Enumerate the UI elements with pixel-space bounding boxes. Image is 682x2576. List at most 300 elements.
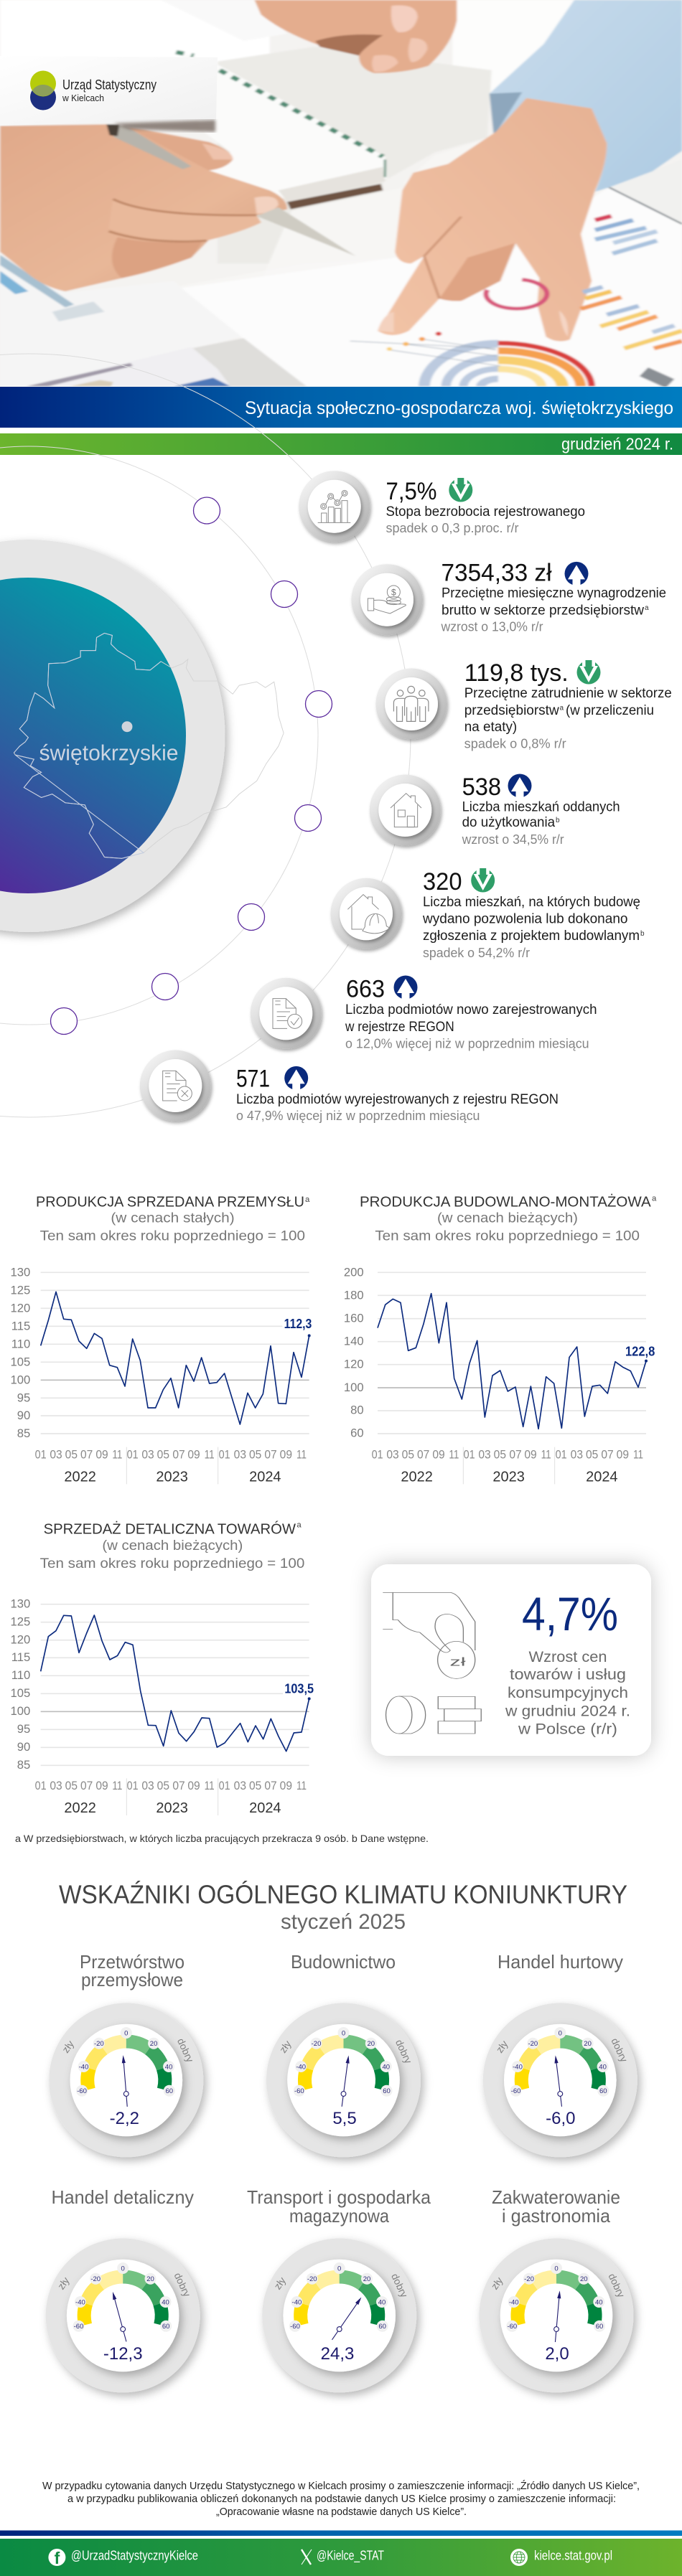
grid and axis: 200 [344,1265,364,1279]
gauge: retail: 20 [146,2275,154,2283]
gauge: wholesale: 0 [559,2029,562,2037]
left hand [0,124,287,291]
icon: arrow up [564,562,589,586]
gauge label: accommodation [492,2186,620,2227]
line chart: construction production [344,1194,657,1485]
gauge: construction: 40 [383,2063,390,2071]
grid and axis: 05 [494,1448,506,1462]
last value: 103,5 [284,1680,314,1696]
grid and axis: 07 [80,1779,93,1792]
heading: business climate: WSKAŹNIKI OGÓLNEGO KLIMATU KONIUNKTURY [59,1880,627,1909]
grid and axis: 01 [219,1448,230,1462]
grid and axis: 11 [449,1448,459,1462]
icon: arrow up [393,976,418,1000]
label: b [556,817,560,824]
grid and axis: 2024 [249,1800,281,1816]
label: Liczba mieszkań, na których budowę [423,895,640,910]
callout text: w Polsce (r/r) [518,1721,617,1738]
series line [378,1294,646,1429]
last value: 112,3 [284,1316,312,1331]
label [462,799,620,830]
grid and axis: 2022 [64,1800,96,1816]
grid and axis: 09 [95,1779,108,1792]
gauge: transport: -60 [290,2323,300,2331]
change: spadek o 54,2% r/r [423,946,530,960]
gauge: industry: -40 [79,2063,88,2071]
footer blue strip [0,2530,682,2536]
grid and axis: 09 [187,1448,200,1462]
grid and axis: 11 [296,1448,307,1462]
indicator: wages [352,560,666,635]
gauge: retail: 40 [162,2298,169,2306]
citation note: W przypadku cytowania danych Urzędu Statystycznego w Kielcach prosimy o zamieszczenie informacji: „Źródło danych US Kielce”, [42,2480,640,2492]
grid and axis [344,1265,646,1485]
label: a [560,705,564,712]
grid and axis: 110 [11,1337,30,1350]
change: o 12,0% więcej niż w poprzednim miesiącu [345,1037,589,1051]
value: 538 [462,774,501,801]
change: wzrost o 34,5% r/r [462,832,564,847]
last value [284,1680,314,1700]
website: kielce.stat.gov.pl [534,2549,612,2563]
grid and axis: 11 [296,1779,307,1792]
footnote: a W przedsiębiorstwach, w których liczba pracujących przekracza 9 osób. b Dane wstępne. [15,1833,429,1844]
gauge: industry: 20 [150,2040,157,2048]
icon: arrow down [471,868,495,893]
gauge: wholesale: -40 [513,2063,523,2071]
grid and axis: 05 [249,1448,261,1462]
gauge: construction: zły [277,2039,294,2055]
series line [41,1292,309,1424]
grid and axis: 01 [464,1448,475,1462]
callout value: 4,7% [522,1587,618,1640]
gauge label: transport: Transport i gospodarka [247,2186,431,2208]
grid and axis: 03 [478,1448,491,1462]
grid and axis: 115 [11,1319,30,1332]
grid and axis: 115 [11,1650,30,1664]
gauge: transport [262,2239,416,2392]
indicator: new REGON entities [251,976,597,1051]
gauge label: transport [247,2186,431,2227]
icon: hand with coins [352,564,422,635]
grid and axis: 05 [157,1779,169,1792]
gauge: industry: 0 [124,2029,128,2037]
grid and axis: 09 [432,1448,445,1462]
change: o 47,9% więcej niż w poprzednim miesiącu [236,1109,480,1123]
pen [106,124,192,169]
facebook handle: @UrzadStatystycznyKielce [71,2549,198,2563]
purple nodes [50,497,332,1035]
grid and axis: 11 [205,1448,215,1462]
label [464,686,672,735]
gauge: construction: dobry [393,2038,414,2065]
gauge: construction: 5,5 [332,2109,357,2128]
grid and axis: 03 [50,1779,62,1792]
map outline inside circle [14,633,161,858]
gauge: retail: 60 [162,2323,169,2331]
gauge: accommodation: dobry [606,2272,627,2299]
gauge: transport: 0 [337,2265,341,2272]
gauge: accommodation: 2,0 [545,2344,569,2364]
grid and axis: 2023 [492,1469,525,1485]
grid and axis: 130 [11,1597,30,1610]
indicator: employment [376,659,672,751]
grid and axis: 05 [157,1448,169,1462]
label [422,895,645,944]
grid and axis: 05 [586,1448,598,1462]
grid and axis: 120 [11,1301,30,1315]
series line [41,1615,309,1752]
grid and axis: 03 [234,1779,246,1792]
gauge: accommodation: 0 [554,2265,559,2272]
grid and axis: 90 [17,1740,30,1754]
gauge: retail: -12,3 [103,2344,143,2364]
sleeve white [272,24,283,32]
callout text [505,1649,630,1738]
gauge: accommodation: -20 [524,2275,534,2283]
gauge label: accommodation: i gastronomia [502,2205,611,2227]
chart title [360,1194,657,1244]
icon: logo circles [30,70,56,111]
label: do użytkowania [462,815,556,830]
gauge: retail: dobry [172,2271,193,2298]
callout text: towarów i usług [510,1667,626,1683]
right shirt [490,0,682,192]
heading: business climate [59,1880,627,1934]
gauge: industry: -2,2 [110,2109,139,2128]
gauge: wholesale: 60 [599,2087,607,2095]
grid and axis: 11 [112,1448,122,1462]
grid and axis: 09 [280,1779,292,1792]
gauge: accommodation: -60 [507,2323,517,2331]
line chart: retail sales [11,1520,314,1816]
gauge: wholesale: -20 [528,2040,538,2048]
grid and axis: 01 [372,1448,383,1462]
grid and axis: 100 [11,1373,30,1386]
grid and axis: 01 [556,1448,567,1462]
icon: globe [510,2549,528,2566]
grid and axis: 09 [524,1448,537,1462]
label: zgłoszenia z projektem budowlanym [423,929,640,944]
grid and axis: 01 [127,1779,139,1792]
change: spadek o 0,3 p.proc. r/r [386,521,518,535]
chart title: (w cenach bieżących) [437,1211,578,1226]
icon: hand with coins: $ [391,587,396,597]
gauge: transport: -20 [307,2275,317,2283]
citation note: „Opracowanie własne na podstawie danych US Kielce”. [216,2506,467,2518]
grid and axis: 05 [249,1779,261,1792]
last value [284,1316,312,1337]
chart title [36,1194,310,1244]
grid and axis: 07 [601,1448,614,1462]
gauge label: wholesale: Handel hurtowy [498,1951,623,1973]
gauge: accommodation: 40 [595,2298,603,2306]
gauge: wholesale: zły [494,2039,510,2055]
chart title: Ten sam okres roku poprzedniego = 100 [40,1228,305,1244]
grid and axis: 05 [65,1779,78,1792]
label: Liczba podmiotów nowo zarejestrowanych [345,1002,597,1017]
grid and axis: 07 [80,1448,93,1462]
icon: facebook [48,2549,65,2567]
gauge: transport: zły [271,2275,288,2292]
label: a [645,604,649,612]
value: 320 [423,868,462,896]
label: b [640,930,645,938]
gauge: construction: 20 [368,2040,375,2048]
grid and axis: 03 [141,1779,154,1792]
icon: X [302,2549,312,2565]
gauge: accommodation: zły [489,2275,505,2292]
gauge: accommodation: 20 [580,2275,588,2283]
chart title: (w cenach stałych) [111,1211,235,1226]
gauge: retail: -40 [75,2298,85,2306]
grid and axis: 07 [172,1779,185,1792]
grid and axis: 07 [264,1448,277,1462]
map outline outside circle [14,633,284,858]
chart title: a [305,1195,310,1204]
change: wzrost o 13,0% r/r [441,619,543,634]
indicator: dwellings completed [370,774,620,847]
grid and axis: 2023 [156,1469,188,1485]
grid and axis: 05 [65,1448,78,1462]
icon: hand with coins [383,1592,481,1734]
grid and axis: 2022 [64,1469,96,1485]
grid and axis: 180 [344,1289,364,1302]
icon: house with helmet [330,878,402,949]
logo text: w Kielcach [62,93,104,103]
gauge: industry [49,2003,203,2157]
gauge: construction [266,2003,421,2157]
gauge: industry: dobry [175,2036,196,2064]
grid and axis: 120 [11,1632,30,1646]
grid and axis: 105 [11,1686,30,1700]
grid and axis: 95 [17,1722,30,1736]
logo text [62,77,157,103]
title band: blue [0,387,682,428]
gauge: construction: 0 [342,2029,345,2037]
grid and axis: 09 [280,1448,292,1462]
chart title: a [296,1520,302,1529]
gauge: construction: 60 [383,2087,391,2095]
grid and axis: 05 [402,1448,414,1462]
grid and axis: 2023 [156,1800,188,1816]
region name: świętokrzyskie [39,740,178,765]
grid and axis: 09 [187,1779,200,1792]
chart title [40,1520,304,1571]
label: Liczba podmiotów wyrejestrowanych z rejestru REGON [236,1092,559,1107]
label: brutto w sektorze przedsiębiorstw [442,603,644,618]
grid and axis: 120 [344,1358,364,1371]
gauge: industry: 60 [166,2087,173,2095]
indicator: building permits [330,868,645,960]
gauge: wholesale: 40 [599,2063,607,2071]
title band: blue: Sytuacja społeczno-gospodarcza woj. świętokrzyskiego [245,398,673,418]
label: przedsiębiorstw [464,703,559,718]
gauge label: industry [80,1951,184,1990]
last value: 122,8 [625,1343,655,1358]
gauge: transport: -40 [292,2298,302,2306]
grid and axis: 110 [11,1668,30,1682]
panel: region circle [0,540,284,932]
grid and axis: 03 [571,1448,583,1462]
gauge: transport: 60 [378,2323,386,2331]
gauge: wholesale: 20 [584,2040,592,2048]
grid and axis: 11 [112,1779,122,1792]
grid and axis: 125 [11,1283,30,1297]
grid and axis: 140 [344,1335,364,1348]
grid and axis: 11 [633,1448,643,1462]
icon: bar chart [299,471,370,542]
gauge label: construction: Budownictwo [291,1951,396,1973]
value: 119,8 tys. [464,659,569,687]
chart title: (w cenach bieżących) [102,1538,243,1553]
icon: arrow down [449,478,472,502]
chart title: SPRZEDAŻ DETALICZNA TOWARÓW [44,1520,296,1537]
grid and axis: 90 [17,1409,30,1422]
grid and axis: 2022 [401,1469,433,1485]
grid and axis: 85 [17,1758,30,1772]
callout text: konsumpcyjnych [508,1685,628,1701]
callout text: Wzrost cen [528,1649,607,1665]
label: wydano pozwolenia lub dokonano [422,912,627,927]
label [345,1002,597,1035]
gauge label: transport: magazynowa [289,2205,389,2227]
grid and axis: 03 [141,1448,154,1462]
gauge: construction: -60 [294,2087,304,2095]
line chart: industrial production [11,1194,312,1485]
header photo: hands over charts [0,0,682,386]
gauge label: retail: Handel detaliczny [52,2186,194,2208]
grid and axis: 2024 [249,1469,281,1485]
gauge: accommodation [480,2239,633,2392]
grid and axis: 2024 [586,1469,618,1485]
grid and axis [11,1265,309,1485]
gauge: retail: -20 [90,2275,101,2283]
value: 571 [236,1065,270,1092]
panel: inflation callout [371,1564,651,1756]
grid and axis: 07 [417,1448,429,1462]
date band: green [0,433,682,455]
label [442,586,666,618]
X handle: @Kielce_STAT [317,2549,384,2563]
icon: people [376,669,447,739]
grid and axis: 130 [11,1265,30,1279]
gauge label: accommodation: Zakwaterowanie [492,2186,620,2208]
grid and axis: 03 [50,1448,62,1462]
label: (w przeliczeniu [566,703,654,718]
notebook [208,65,387,198]
grid and axis: 07 [509,1448,522,1462]
chart title: a [652,1194,657,1203]
gauge: wholesale: dobry [609,2036,630,2064]
grid and axis: 01 [127,1448,139,1462]
label: Przeciętne miesięczne wynagrodzenie [442,586,666,601]
indicator: unemployment [299,471,585,542]
grid and axis: 100 [11,1704,30,1718]
concentric chart [418,339,500,386]
grid and axis: 11 [205,1779,215,1792]
chart title: PRODUKCJA BUDOWLANO-MONTAŻOWA [360,1194,651,1211]
bars right upper [581,216,682,349]
grid and axis: 03 [386,1448,399,1462]
grid and axis: 160 [344,1312,364,1325]
label: Liczba mieszkań oddanych [462,799,620,814]
logo text: Urząd Statystyczny [62,77,157,93]
citation note [42,2480,640,2518]
icon: arrow up [284,1066,308,1090]
label: Przeciętne zatrudnienie w sektorze [464,686,672,701]
footer panel [0,2539,682,2576]
gauge label: industry: przemysłowe [81,1969,183,1990]
grid and axis: 85 [17,1426,30,1440]
gauge: transport: 24,3 [321,2344,354,2364]
grid and axis: 80 [350,1404,364,1417]
value: 7354,33 zł [441,560,552,587]
gauge: retail: -60 [74,2323,83,2331]
grid and axis [11,1597,309,1816]
grid and axis: 125 [11,1614,30,1628]
icon: facebook: f [55,2549,60,2567]
callout text: w grudniu 2024 r. [505,1703,630,1720]
gauge: industry: -20 [94,2040,104,2048]
icon: document with cross [140,1050,211,1121]
chart title: Ten sam okres roku poprzedniego = 100 [40,1556,304,1571]
gauge: wholesale [483,2003,637,2157]
grid and axis: 11 [541,1448,551,1462]
grid and axis: 07 [172,1448,185,1462]
gauge: retail: zły [55,2275,72,2292]
icon: hand with coins: zł [450,1655,466,1669]
grid and axis: 03 [234,1448,246,1462]
gauge: accommodation: -40 [509,2298,519,2306]
gauge label: industry: Przetwórstwo [80,1951,184,1973]
orbit lines [0,354,411,1117]
grid and axis: 105 [11,1355,30,1368]
citation note: a w przypadku publikowania obliczeń dokonanych na podstawie danych US Kielce prosimy o zamieszczenie informacji: [67,2493,616,2505]
chart title: PRODUKCJA SPRZEDANA PRZEMYSŁU [36,1194,304,1211]
gauge: wholesale: -60 [511,2087,520,2095]
date band: green: grudzień 2024 r. [561,435,673,453]
value: 7,5% [386,478,436,505]
grid and axis: 95 [17,1391,30,1404]
label: Stopa bezrobocia rejestrowanego [386,504,585,520]
gauge: retail: 0 [121,2265,125,2272]
label: w rejestrze REGON [345,1020,454,1035]
gauge: transport: dobry [389,2272,410,2299]
gauge: construction: -40 [296,2063,306,2071]
value: 663 [346,976,385,1003]
grid and axis: 09 [95,1448,108,1462]
grid and axis: 60 [350,1426,364,1440]
gauge: retail [46,2239,200,2392]
top hand [255,0,457,73]
grid and axis: 01 [35,1779,47,1792]
gauge: accommodation: 60 [596,2323,603,2331]
heading: business climate: styczeń 2025 [281,1910,406,1934]
gauge: industry: 40 [165,2063,172,2071]
change: spadek o 0,8% r/r [464,736,566,751]
grid and axis: 09 [617,1448,629,1462]
icon: house [370,775,441,845]
gauge: industry: zły [60,2039,76,2055]
icon: arrow down [577,660,600,685]
dot: Kielce [122,721,132,732]
gauge: transport: 20 [363,2275,370,2283]
chart title: Ten sam okres roku poprzedniego = 100 [375,1228,640,1244]
gauge: transport: 40 [378,2298,386,2306]
grid and axis: 07 [264,1779,277,1792]
grid and axis: 100 [344,1381,364,1394]
